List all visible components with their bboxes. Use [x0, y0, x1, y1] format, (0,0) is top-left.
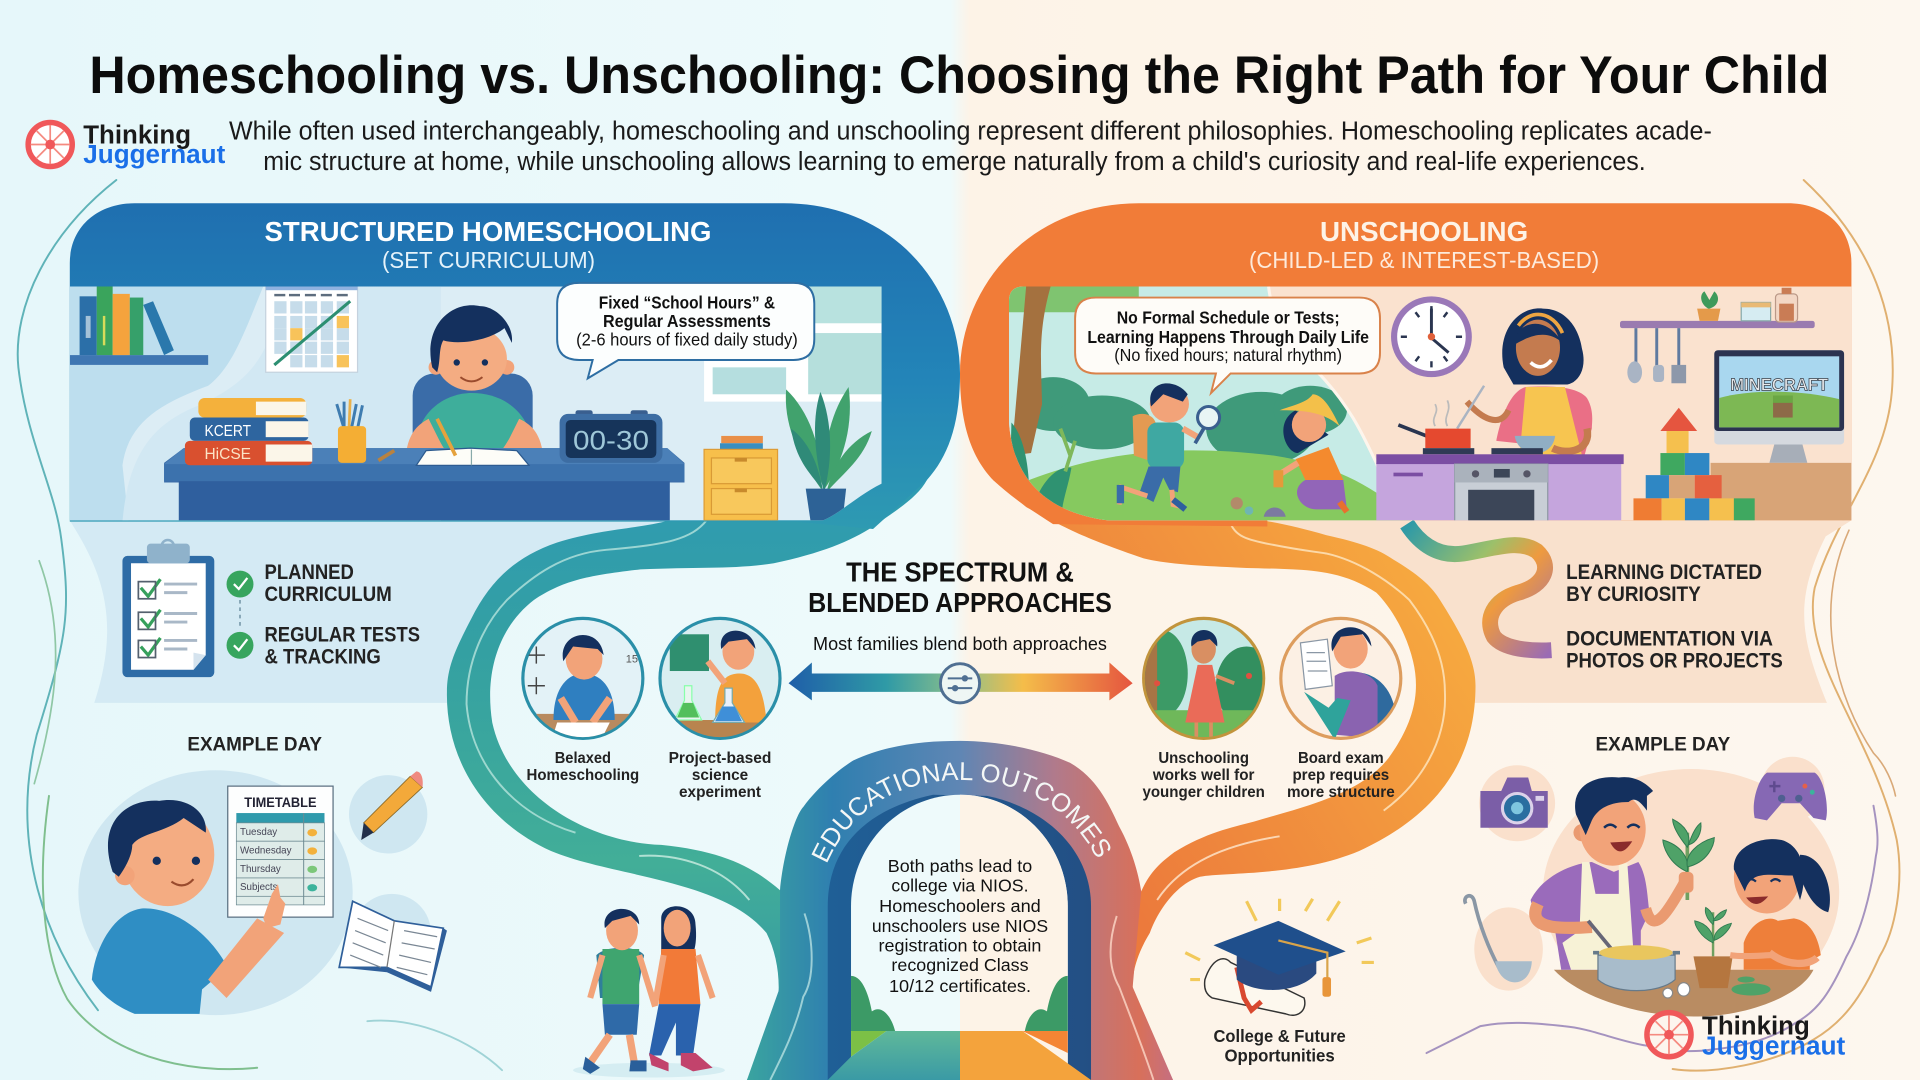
heading: unschooling: (CHILD-LED & INTEREST-BASED) [1249, 247, 1599, 273]
arch text: 10/12 certificates. [889, 976, 1031, 996]
text: unschool features [1566, 561, 1783, 672]
intro text: While often used interchangeably, homeschooling and unschooling represent different philosophies. Homeschooling replicates acade- [229, 118, 1712, 146]
label: EXAMPLE DAY [1596, 735, 1731, 756]
example: board exam prep: more structure [1287, 784, 1395, 801]
block: homeschool features background [70, 520, 670, 703]
girl with hat [1273, 394, 1347, 512]
arch text: registration to obtain [879, 935, 1041, 955]
example: board exam prep: prep requires [1292, 767, 1389, 784]
squiggle connector [1407, 524, 1551, 650]
woman cooking [1457, 308, 1592, 456]
timetable: Wednesday [240, 845, 292, 856]
illustration: graduation cap and diploma [1185, 899, 1374, 1015]
scene: study desk [70, 273, 902, 522]
arch label: EDUCATIONAL OUTCOMES [812, 762, 1110, 862]
example: project-based experiment: science [692, 767, 748, 784]
speech bubble: no formal schedule [1075, 298, 1380, 393]
orange path ribbon [993, 465, 1476, 1080]
logo: bottom: Juggernaut [1702, 1032, 1846, 1060]
example: younger children: works well for [1152, 767, 1254, 784]
pot [1593, 945, 1680, 991]
logo: bottom [1647, 1013, 1846, 1060]
speech curve edge [1269, 287, 1414, 522]
text: homeschool features [264, 561, 420, 669]
illustration: walking children [573, 906, 725, 1078]
boy pointing [92, 800, 284, 1014]
example: board exam prep [1281, 618, 1401, 801]
textbook stack: KCERT [204, 423, 251, 440]
text: unschool features: LEARNING DICTATED [1566, 561, 1762, 584]
arch text: recognized Class [891, 955, 1029, 975]
intro text [229, 118, 1712, 176]
text: college outcome: College & Future [1213, 1026, 1346, 1046]
speech bubble: no formal schedule: No Formal Schedule or Tests; [1117, 307, 1340, 327]
heading: unschooling: UNSCHOOLING [1320, 216, 1528, 247]
teal path ribbon [447, 465, 927, 1080]
toy blocks [1633, 408, 1755, 522]
arch text: college via NIOS. [891, 875, 1029, 895]
heading: structured homeschooling [264, 216, 711, 273]
logo: top: Juggernaut [83, 141, 226, 169]
example day: unschooling [1465, 735, 1839, 1017]
boy at desk [407, 305, 542, 463]
example: relaxed homeschooling [520, 618, 643, 784]
speech bubble: fixed school hours: Regular Assessments [603, 311, 771, 331]
text: college outcome: Opportunities [1224, 1046, 1335, 1066]
icon: game controller [1754, 773, 1827, 820]
example: younger children [1142, 616, 1266, 800]
arch text: Both paths lead to [888, 856, 1032, 876]
backdrop circles [1474, 757, 1839, 1016]
table [1554, 970, 1813, 1017]
timetable [228, 786, 333, 928]
speech bubble: no formal schedule: (No fixed hours; natural rhythm) [1114, 345, 1342, 365]
speech bubble: fixed school hours: Fixed “School Hours” & [599, 293, 775, 313]
kitchen counter [1376, 454, 1624, 522]
wall clock [1391, 296, 1472, 377]
timetable: TIMETABLE [244, 794, 317, 810]
example: project-based experiment: experiment [679, 784, 762, 801]
example day: homeschooling [78, 735, 447, 1015]
speech bubble: fixed school hours [557, 283, 814, 378]
ground and path [828, 1031, 1091, 1080]
heading: structured homeschooling: (SET CURRICULUM) [382, 247, 595, 273]
timetable: Subjects [240, 882, 278, 893]
text: unschool features: PHOTOS OR PROJECTS [1566, 649, 1783, 672]
cabinet [704, 436, 778, 520]
open book and pen [416, 419, 529, 465]
scene: nature and kitchen [1004, 282, 1854, 527]
girl [1730, 839, 1830, 970]
digital clock: 00-30 [573, 425, 649, 455]
text: homeschool features: PLANNED [264, 561, 354, 584]
icon: ladle [1465, 896, 1532, 982]
icon: pencil [361, 771, 423, 840]
minecraft monitor [1714, 350, 1844, 463]
speech bubble: fixed school hours: (2-6 hours of fixed daily study) [576, 329, 798, 349]
icon: open book [339, 901, 447, 992]
digital clock [560, 410, 662, 463]
intro text: mic structure at home, while unschooling allows learning to emerge naturally from a child's curiosity and real-life experiences. [263, 148, 1646, 176]
label: EXAMPLE DAY [187, 735, 322, 756]
text: unschool features: DOCUMENTATION VIA [1566, 627, 1773, 650]
timetable: Thursday [240, 864, 281, 875]
textbook stack: HiCSE [204, 446, 251, 463]
leaves and eggs [1663, 977, 1771, 998]
arch text: unschoolers use NIOS [872, 916, 1048, 936]
example: relaxed homeschooling: Homeschooling [527, 767, 639, 784]
arch text [872, 856, 1048, 996]
panel: structured homeschooling [70, 203, 960, 529]
stove and pan [1398, 400, 1543, 454]
boy with magnifier [1117, 383, 1220, 509]
example: younger children: younger children [1142, 784, 1265, 801]
title: Homeschooling vs. Unschooling: Choosing the Right Path for Your Child [89, 46, 1829, 105]
example: project-based experiment: Project-based [669, 750, 771, 767]
logo: top: Thinking [83, 121, 191, 149]
icon: clipboard [122, 540, 214, 677]
text: unschool features: BY CURIOSITY [1566, 583, 1701, 606]
heading: spectrum: THE SPECTRUM & [846, 557, 1074, 588]
minecraft monitor: MINECRAFT [1730, 375, 1829, 395]
heading: structured homeschooling: STRUCTURED HOMESCHOOLING [264, 216, 711, 247]
bushes [851, 976, 1068, 1031]
block: unschool features background [1249, 520, 1851, 703]
wall shelf and utensils [1620, 288, 1815, 383]
text: homeschool features: REGULAR TESTS [264, 624, 420, 647]
father cooking [1531, 777, 1685, 970]
timetable: Tuesday [240, 827, 277, 838]
potted plant [1693, 907, 1733, 988]
desk [164, 448, 684, 522]
example: younger children: Unschooling [1158, 750, 1249, 767]
text: homeschool features: & TRACKING [264, 646, 381, 669]
backdrop circles [78, 770, 431, 1015]
calendar [265, 286, 358, 373]
text: homeschool features: CURRICULUM [264, 583, 392, 606]
example: project-based experiment [660, 618, 784, 801]
arch: educational outcomes [747, 740, 1173, 1080]
arch text: Homeschoolers and [879, 896, 1041, 916]
bookshelf [70, 285, 208, 365]
example: board exam prep: Board exam [1298, 750, 1384, 767]
outdoor scene [1004, 282, 1420, 527]
heading: spectrum: BLENDED APPROACHES [808, 587, 1112, 618]
example: relaxed homeschooling: 15 [626, 653, 638, 665]
pencil cup [337, 399, 394, 463]
heading: spectrum: Most families blend both approaches [813, 633, 1107, 654]
sprig in hand [1663, 819, 1714, 900]
arrow: spectrum [789, 662, 1133, 703]
potted plant [786, 387, 872, 522]
icon: camera [1480, 778, 1548, 828]
icon: check marks [227, 571, 253, 659]
logo: top [28, 121, 226, 169]
heading: spectrum [808, 557, 1112, 654]
heading: unschooling [1249, 216, 1599, 273]
textbook stack [185, 398, 312, 465]
example: relaxed homeschooling: Belaxed [555, 750, 611, 767]
logo: bottom: Thinking [1702, 1013, 1810, 1041]
text: college outcome [1213, 1026, 1346, 1066]
panel: unschooling [960, 203, 1854, 527]
speech bubble: no formal schedule: Learning Happens Through Daily Life [1087, 327, 1369, 347]
window [704, 287, 888, 402]
